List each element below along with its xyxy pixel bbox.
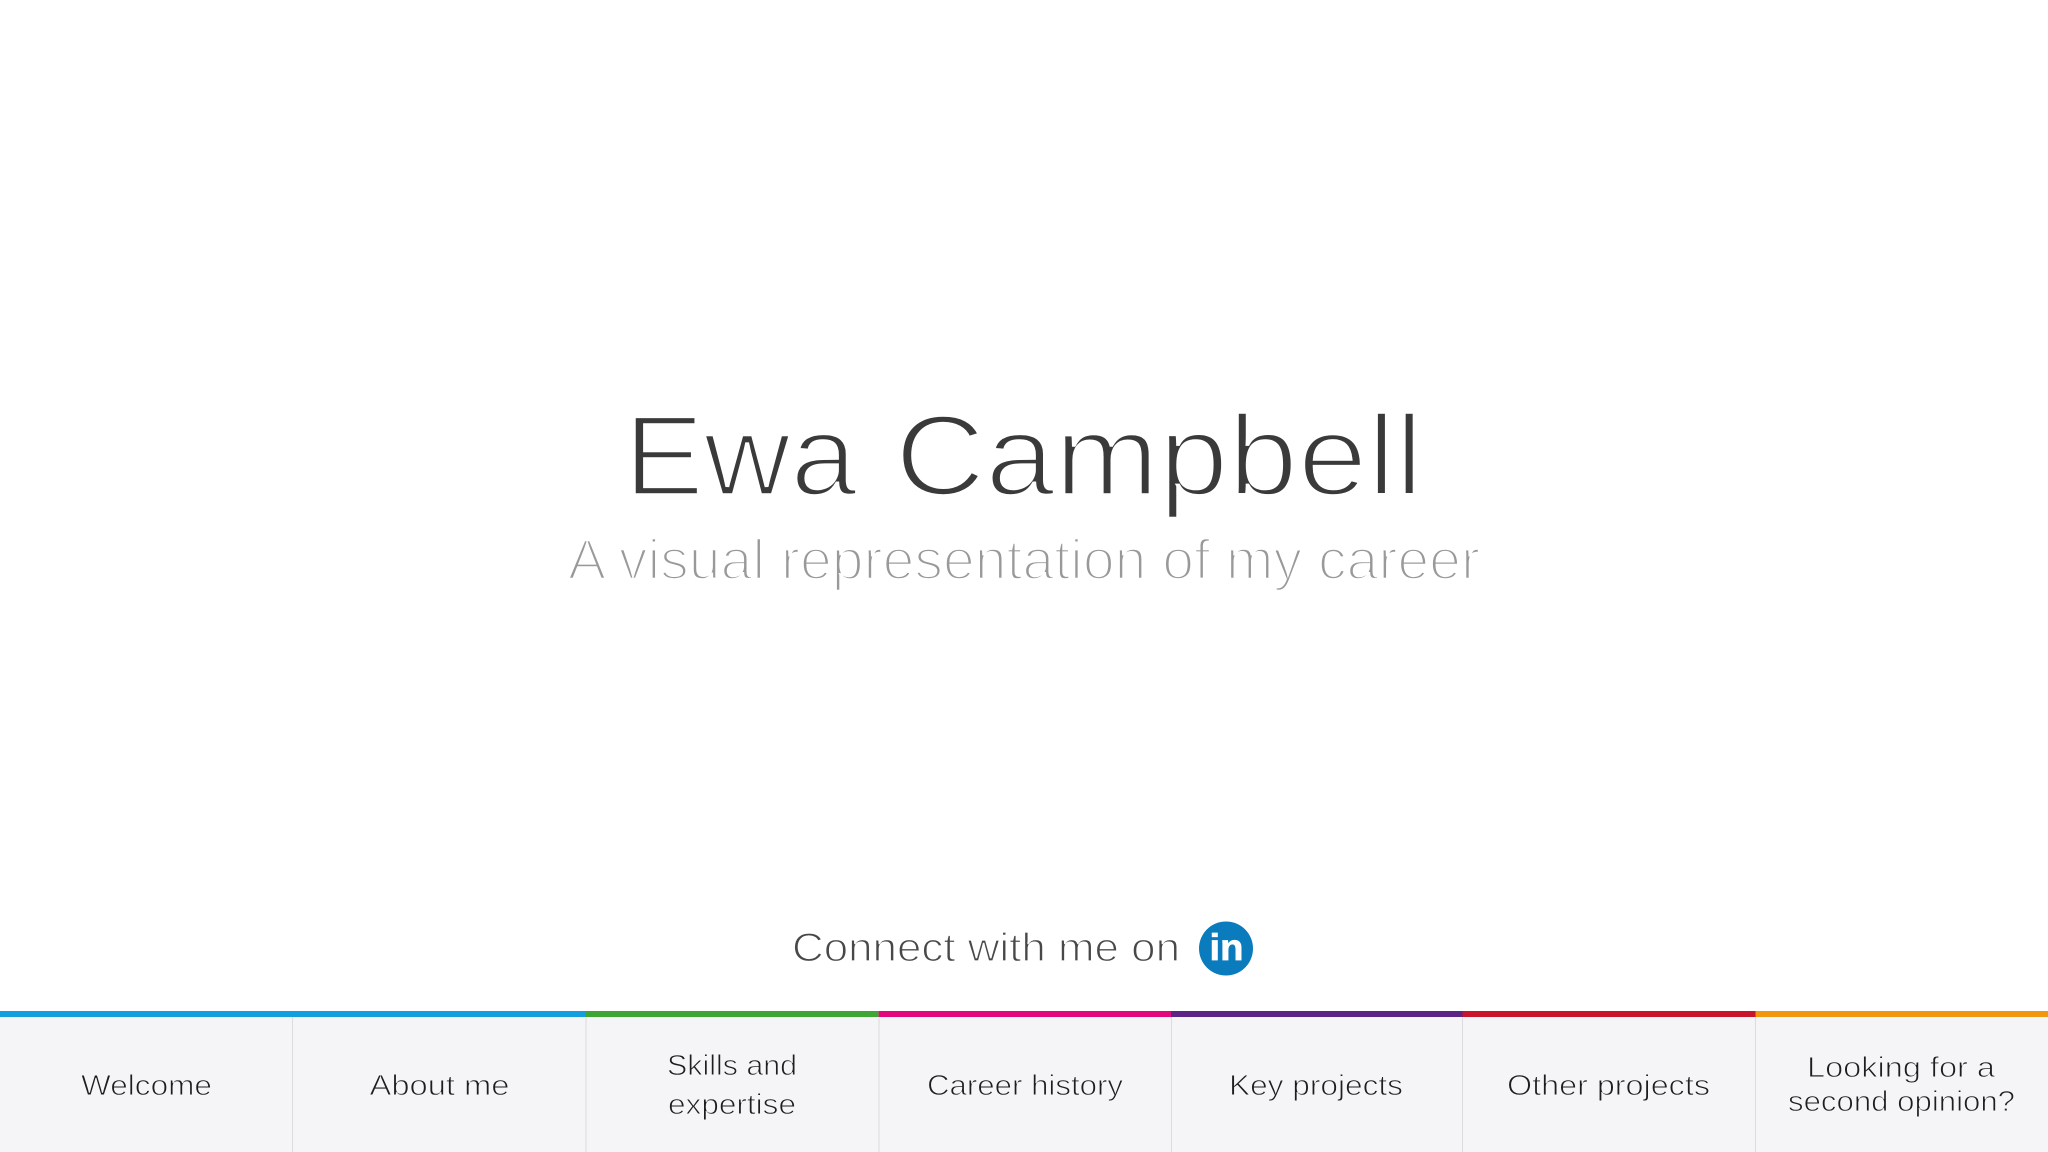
tab: skills and expertise: Skills and bbox=[667, 1050, 797, 1082]
tab: other projects: Other projects bbox=[1507, 1070, 1710, 1102]
navigation footer bbox=[0, 1011, 2048, 1152]
connect text: Connect with me on bbox=[792, 926, 1180, 970]
subtitle: A visual representation of my career bbox=[568, 528, 1480, 592]
tab: about me bbox=[292, 1011, 586, 1152]
tab: career history bbox=[878, 1011, 1171, 1152]
tab: welcome: Welcome bbox=[81, 1070, 212, 1102]
tab: looking for a second opinion: second opinion? bbox=[1788, 1086, 2015, 1118]
title: Campbell bbox=[895, 393, 1423, 520]
title: Ewa bbox=[624, 393, 858, 520]
tab: key projects: Key projects bbox=[1229, 1070, 1403, 1102]
tab: looking for a second opinion: Looking for a bbox=[1807, 1052, 1996, 1084]
icon: linkedin: in bbox=[1210, 927, 1244, 968]
tab: key projects bbox=[1171, 1011, 1463, 1152]
tab: looking for a second opinion bbox=[1755, 1011, 2048, 1152]
title bbox=[624, 393, 1423, 520]
icon: linkedin bbox=[1199, 922, 1253, 976]
tab: about me: About me bbox=[370, 1070, 510, 1102]
tab: skills and expertise bbox=[586, 1011, 879, 1152]
tab: career history: Career history bbox=[927, 1070, 1124, 1102]
tab: skills and expertise: expertise bbox=[668, 1089, 796, 1121]
tab: other projects bbox=[1462, 1011, 1756, 1152]
tab: welcome bbox=[0, 1011, 293, 1102]
